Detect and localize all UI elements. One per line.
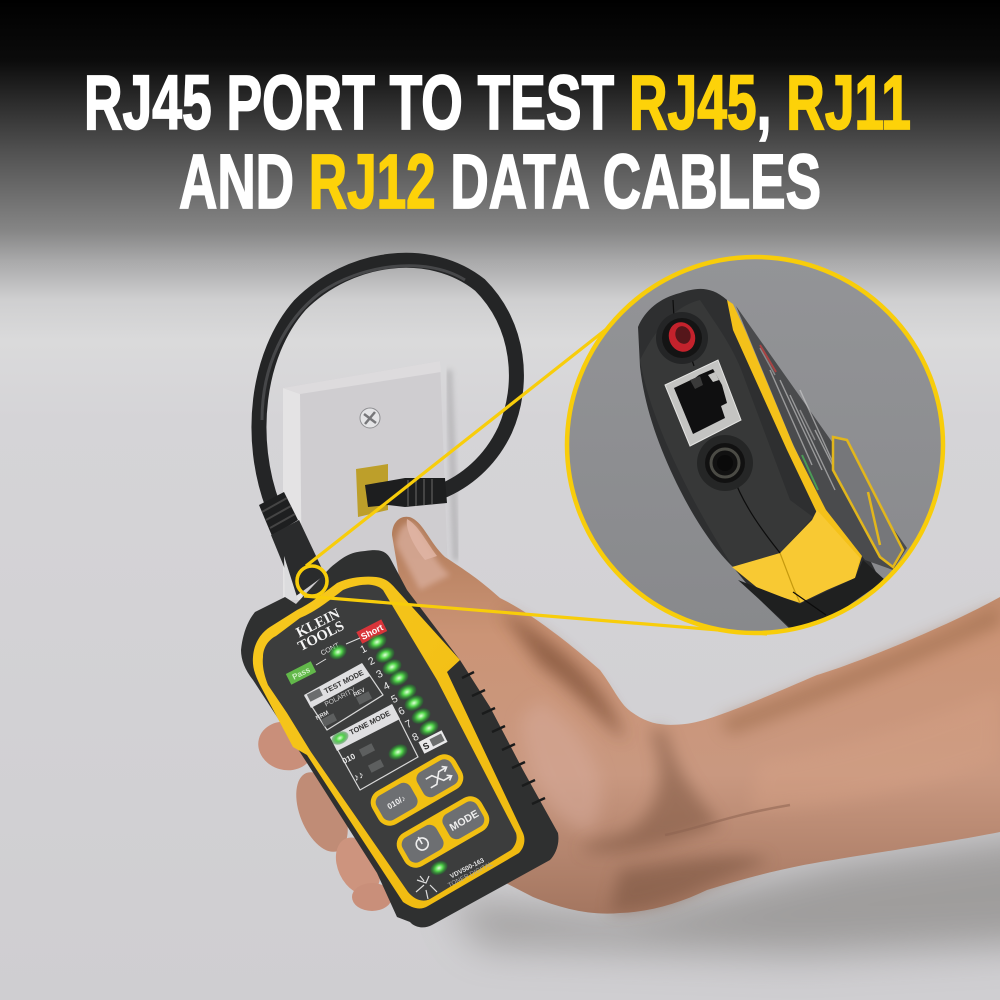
wall plate — [283, 361, 456, 610]
red jack — [656, 312, 708, 364]
callout circle: port close-up — [567, 257, 943, 633]
power LED — [428, 858, 450, 878]
callout connector lines — [297, 316, 767, 634]
wall jack — [356, 464, 388, 517]
seam line — [673, 300, 780, 553]
S indicator: S — [421, 740, 431, 752]
short label — [356, 619, 387, 644]
shaded hand folds — [500, 610, 625, 740]
clear plug at tester — [271, 520, 325, 596]
thumb highlight — [396, 523, 450, 590]
test mode panel: TEST MODE — [323, 668, 365, 696]
plug boot at tester — [259, 492, 298, 536]
tone mode panel: TONE MODE — [348, 709, 392, 737]
dark face — [263, 585, 517, 901]
patch cable — [259, 260, 516, 600]
wire LED column 1-8: 3 — [374, 668, 385, 681]
lower black edge — [738, 560, 885, 632]
tone mode panel: 010 — [341, 751, 357, 766]
fingers — [253, 716, 392, 911]
title — [84, 60, 911, 225]
hand shadow on wall — [450, 825, 1000, 955]
upper button pair: 010/♪ — [386, 794, 407, 811]
continuity LED and label: CONT — [320, 642, 341, 657]
hand and forearm — [253, 517, 1000, 914]
continuity LED and label — [316, 638, 360, 665]
side buttons — [833, 437, 903, 567]
wire LED column 1-8 — [358, 631, 448, 754]
brand logo: KLEIN — [294, 605, 343, 641]
shuffle arrows icon — [424, 765, 453, 790]
callout ring — [567, 257, 943, 633]
thumbnail — [407, 519, 437, 560]
brand logo: TOOLS — [295, 618, 347, 655]
title line 2: AND RJ12 DATA CABLES — [179, 139, 821, 225]
wall plate screw — [360, 408, 380, 428]
tone mode panel: ♪♪ — [352, 770, 366, 784]
test mode panel — [304, 663, 383, 730]
small target circle — [297, 566, 327, 596]
test mode panel: NRM — [315, 710, 330, 722]
lower button pair — [392, 792, 494, 872]
model text: TONER DIGITAL — [447, 860, 494, 889]
test mode panel: REV — [353, 688, 366, 699]
wire LED column 1-8: 6 — [396, 705, 407, 718]
wire LED column 1-8: 1 — [358, 643, 369, 656]
plug in wall jack — [365, 478, 447, 507]
wire LED column 1-8: 2 — [366, 655, 377, 668]
grip chevrons — [462, 672, 545, 804]
yellow side strip — [727, 300, 862, 578]
wire LED column 1-8: 5 — [389, 693, 400, 706]
wire LED column 1-8: 8 — [410, 731, 421, 744]
flashlight icon — [416, 876, 437, 899]
wire LED column 1-8: 7 — [403, 718, 414, 731]
tone mode panel — [329, 704, 418, 790]
pass label: Pass — [291, 665, 312, 682]
rubber housing — [241, 550, 558, 927]
RJ45 port — [665, 360, 741, 446]
device face edge-on — [736, 306, 907, 570]
upper button pair — [366, 750, 468, 830]
tester body — [241, 550, 558, 927]
yellow frame — [253, 577, 524, 909]
lower button pair: MODE — [448, 808, 481, 834]
tester end body — [638, 289, 880, 632]
black jack — [697, 435, 753, 491]
short label: Short — [359, 622, 385, 642]
pass label — [286, 661, 316, 685]
test mode panel: POLARITY — [324, 687, 357, 708]
model text: VDV500-163 — [449, 857, 485, 880]
title line 1: RJ45 PORT TO TEST RJ45, RJ11 — [84, 60, 911, 146]
palm and arm — [392, 517, 1000, 914]
wire LED column 1-8: 4 — [381, 680, 392, 693]
